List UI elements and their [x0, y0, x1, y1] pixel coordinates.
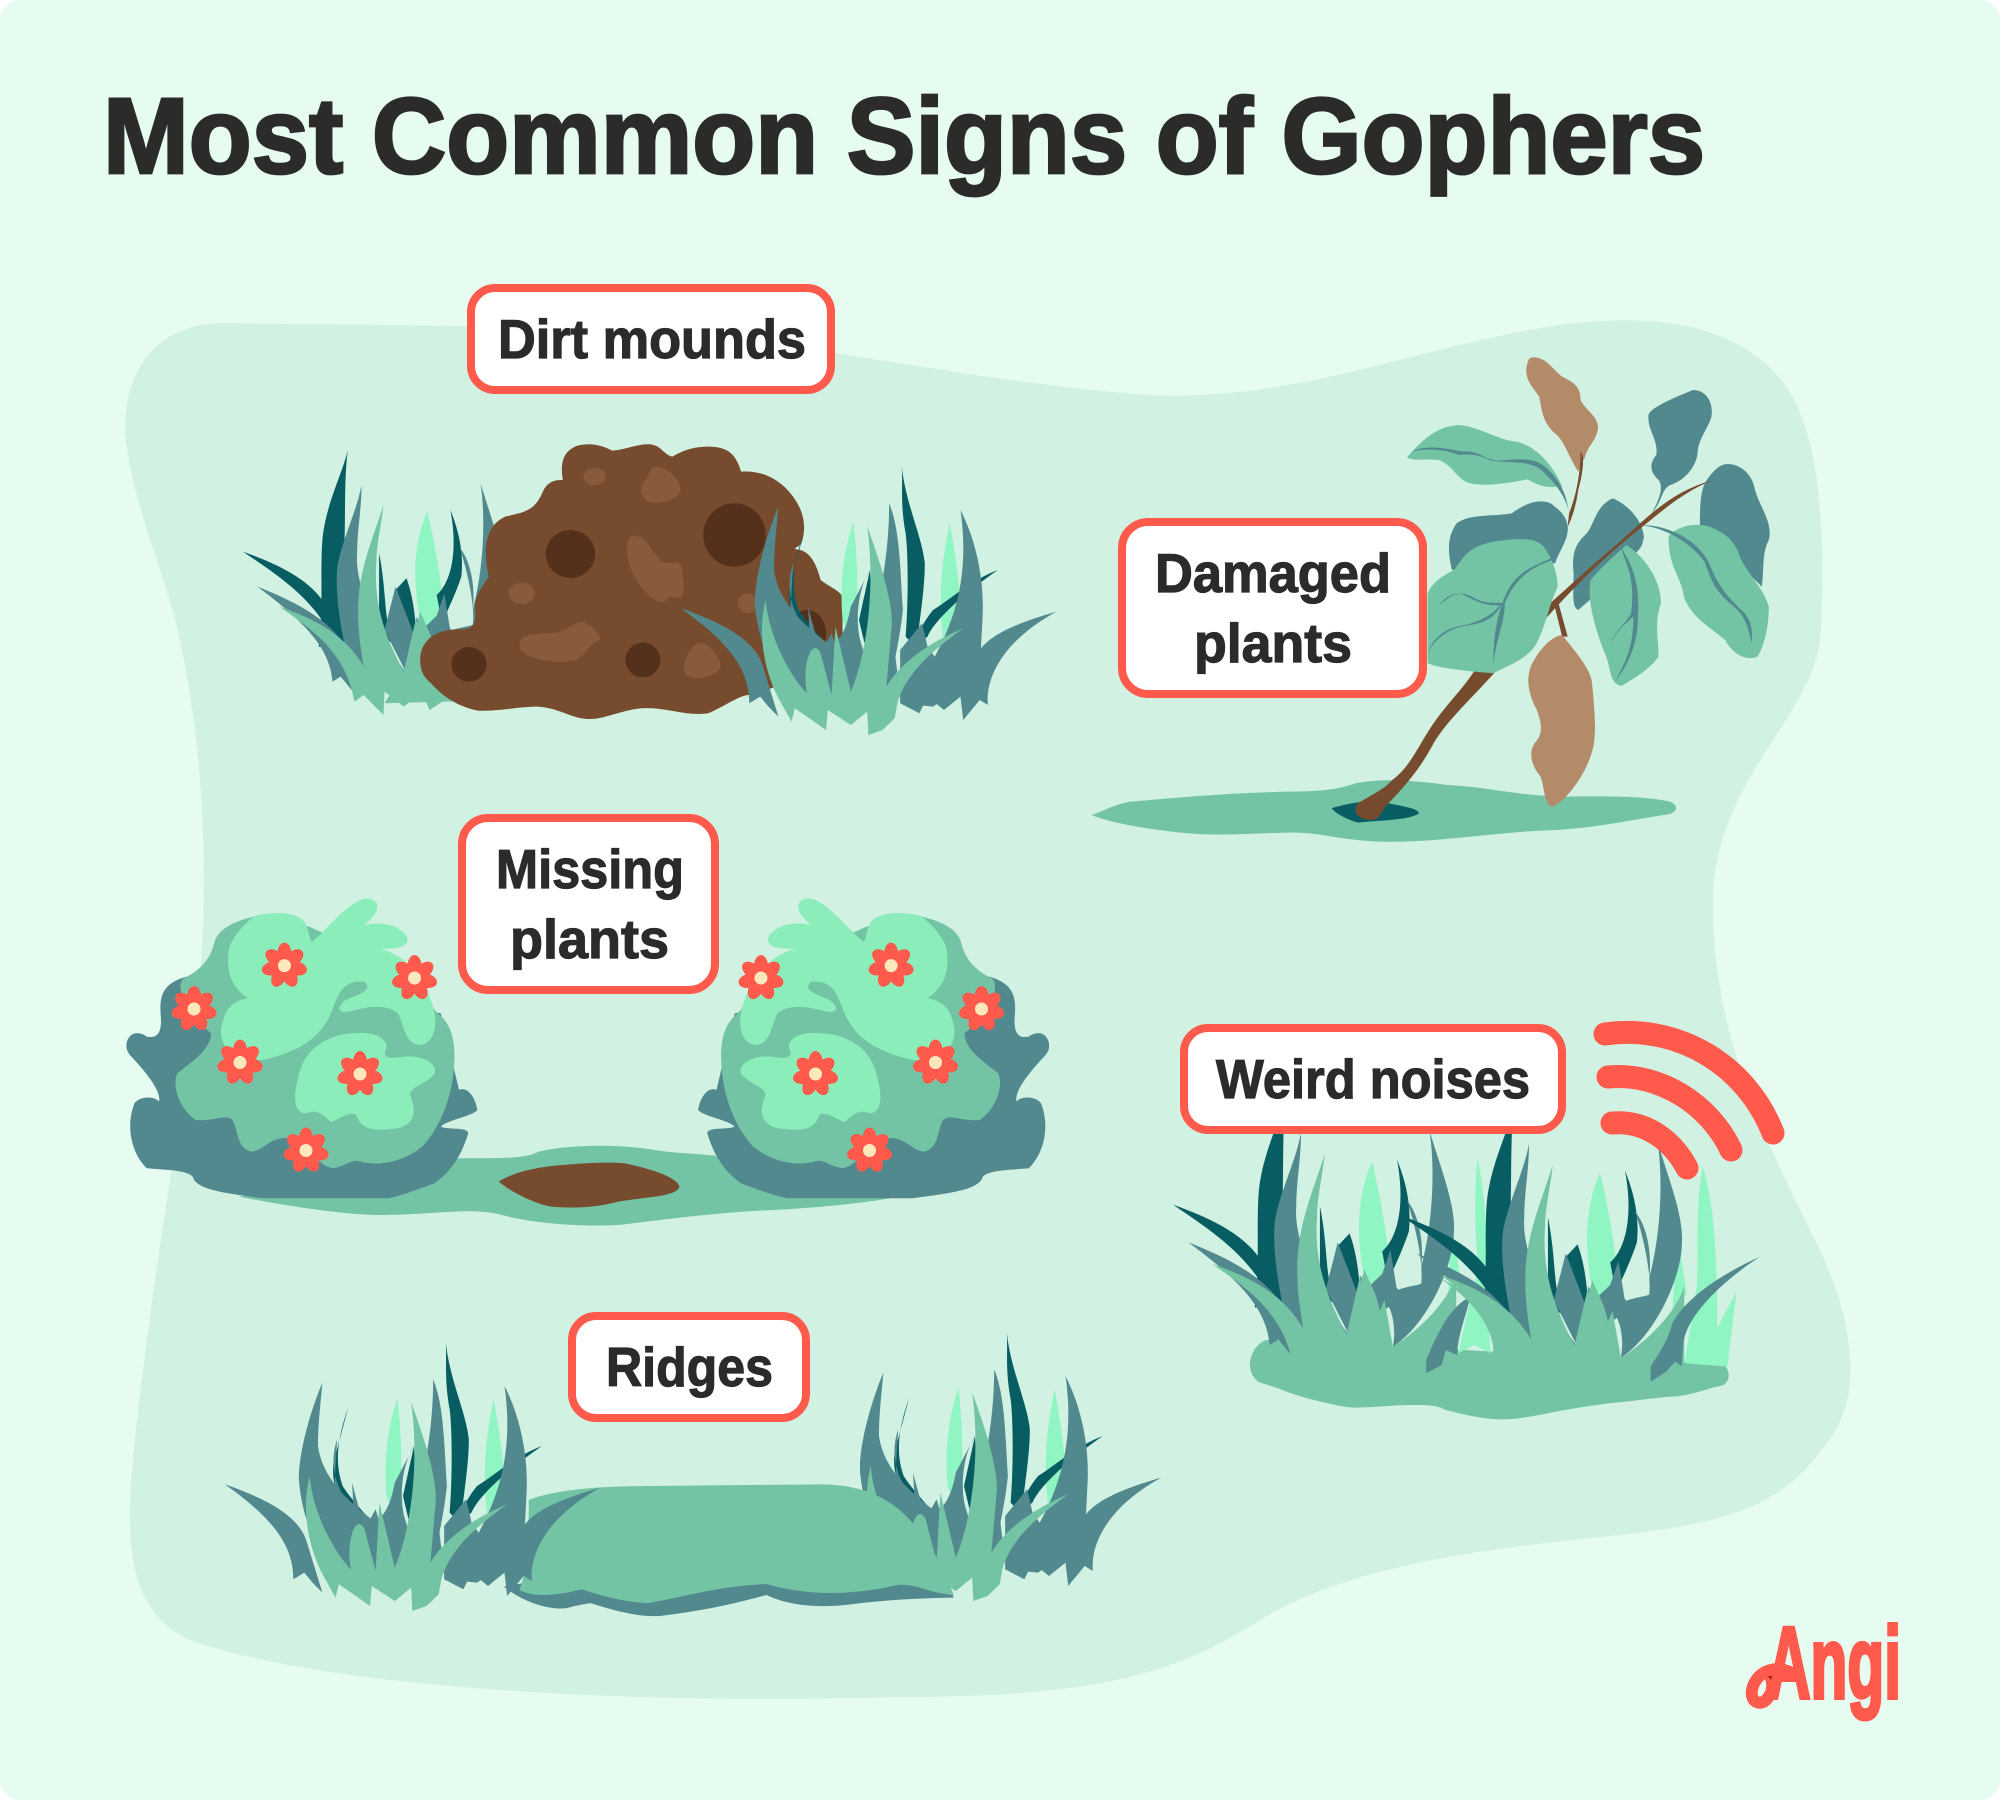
extra front blades [1426, 1257, 1760, 1382]
logo: Angi [1752, 1606, 1901, 1720]
label: ridges [572, 1316, 806, 1418]
grass tuft left [1173, 1095, 1456, 1381]
right bush with flowers [698, 898, 1049, 1198]
panel: ridges [225, 1316, 1161, 1616]
sound wave arcs [1605, 1032, 1773, 1168]
label: dirt mounds: Dirt mounds [498, 308, 806, 370]
dirt mound [420, 444, 843, 719]
grass tuft right [860, 1333, 1162, 1601]
left bush with flowers [126, 898, 477, 1198]
logo: Angi: Angi [1767, 1606, 1901, 1720]
label: damaged plants: plants [1194, 612, 1352, 674]
grass tuft left [225, 1343, 600, 1611]
extra back blades [1448, 1158, 1736, 1367]
grass tuft left [243, 450, 505, 715]
panel: damaged plants [1091, 357, 1770, 842]
label: damaged plants [1122, 522, 1423, 694]
label: ridges: Ridges [606, 1336, 773, 1398]
label: weird noises: Weird noises [1216, 1048, 1530, 1110]
ground patch [1250, 1340, 1729, 1419]
title: Most Common Signs of Gophers [103, 75, 1705, 196]
label: missing plants: Missing [496, 838, 684, 900]
label: dirt mounds [471, 288, 831, 390]
soil ridge [504, 1484, 954, 1616]
damaged plant illustration [1091, 357, 1770, 842]
label: damaged plants: Damaged [1155, 542, 1391, 604]
panel: weird noises [1173, 1028, 1773, 1419]
panel: dirt mounds [243, 288, 1056, 735]
label: missing plants: plants [510, 908, 669, 970]
panel: missing plants [126, 818, 1049, 1226]
grass tuft right [1401, 1106, 1684, 1392]
ground with bare patch [239, 1146, 900, 1226]
label: weird noises [1184, 1028, 1562, 1130]
grass tuft right [681, 467, 1056, 735]
label: missing plants [462, 818, 715, 990]
background blob [125, 320, 1850, 1699]
